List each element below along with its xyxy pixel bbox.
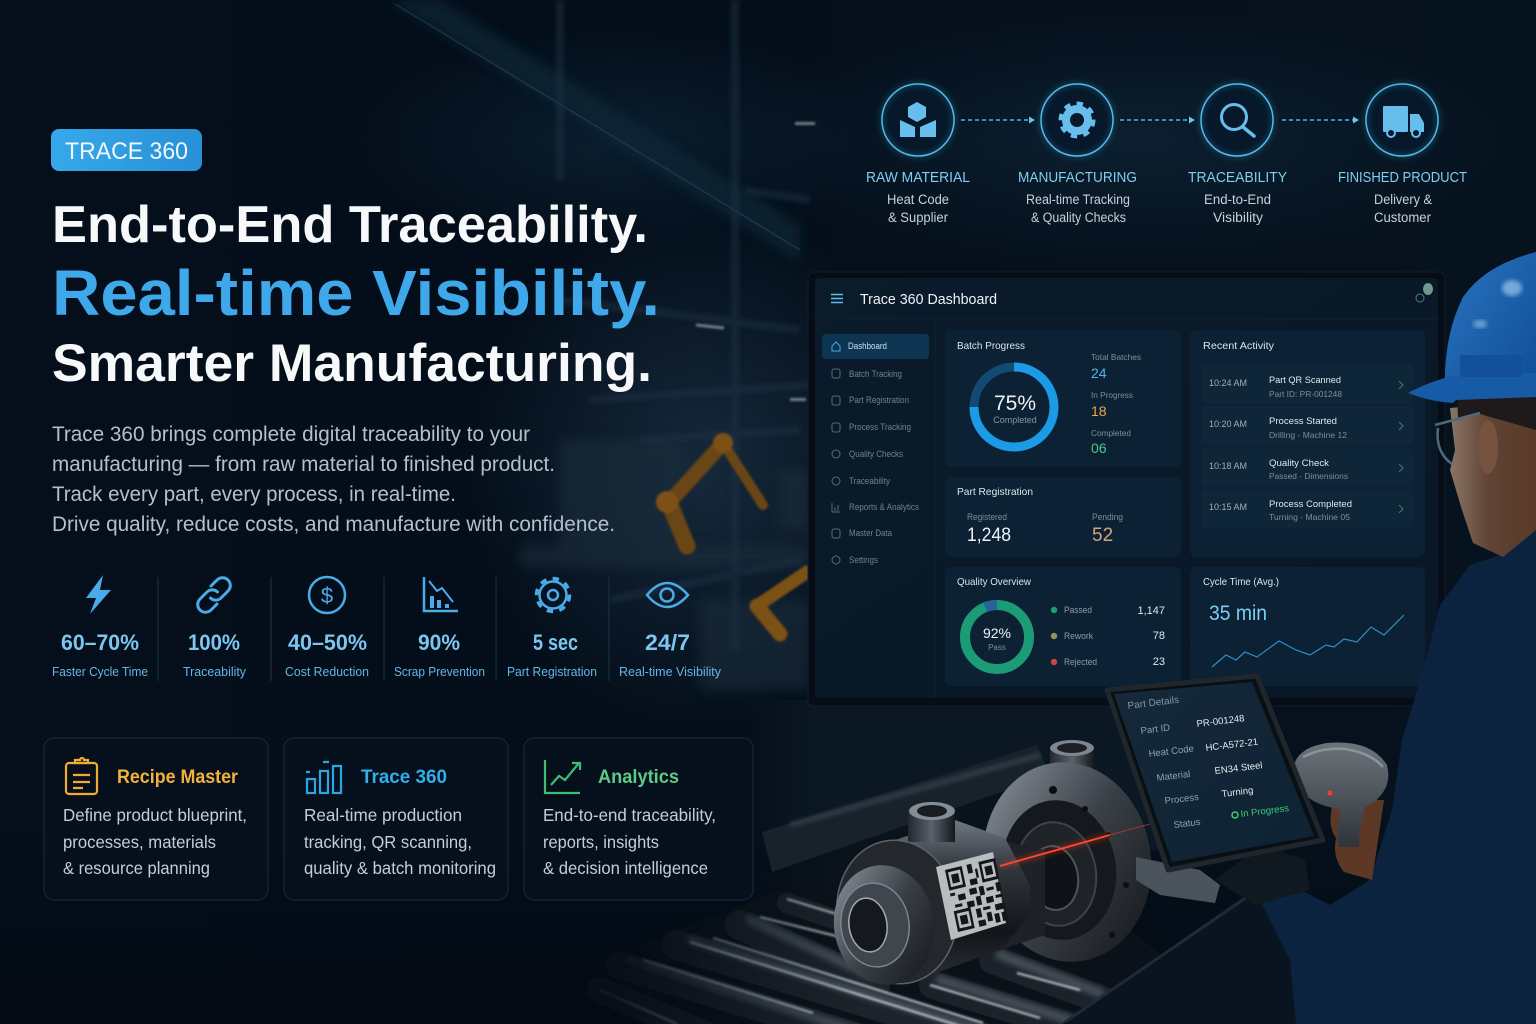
title — [52, 196, 660, 393]
step: finished product: Customer — [1374, 210, 1431, 225]
tablet: part details: HC-A572-21 — [1205, 737, 1259, 754]
dashboard monitor — [808, 272, 1445, 706]
step: raw material — [866, 84, 970, 225]
stat: part registration: Part Registration — [507, 665, 597, 679]
rear flange — [970, 740, 1220, 973]
panel: recent activity: Recent Activity — [1203, 340, 1275, 352]
stat: part registration — [507, 578, 597, 679]
rollers — [600, 899, 1110, 1024]
sidebar navigation — [822, 334, 929, 565]
card: recipe master: Define product blueprint, — [63, 805, 247, 825]
card: trace 360: quality & batch monitoring — [304, 858, 496, 878]
panel: batch progress: 24 — [1091, 365, 1107, 381]
stat: traceability: 100% — [188, 630, 240, 655]
stat: faster cycle time — [52, 575, 148, 679]
tablet: part details: Material — [1156, 769, 1191, 784]
worker — [1215, 252, 1536, 1024]
sidebar navigation: Dashboard — [848, 341, 887, 351]
tablet: part details: EN34 Steel — [1214, 760, 1263, 777]
dashboard header: Trace 360 Dashboard — [860, 292, 997, 308]
tablet: part details: In Progress — [1240, 803, 1290, 820]
panel: quality overview — [945, 567, 1181, 686]
stat: cost reduction: $ — [321, 583, 333, 608]
intro paragraph — [52, 423, 615, 536]
ear — [1478, 420, 1498, 474]
tablet: part details: Status — [1173, 817, 1201, 831]
panel: cycle time — [1190, 567, 1425, 686]
stats row — [52, 575, 722, 681]
panel: cycle time: Cycle Time (Avg.) — [1203, 576, 1279, 588]
title: End-to-End Traceability. — [52, 196, 648, 254]
sidebar navigation: Batch Tracking — [849, 369, 902, 379]
neck and face — [1450, 400, 1536, 557]
activity rows: Part QR Scanned — [1269, 375, 1341, 386]
panel: recent activity — [1190, 330, 1425, 557]
panel: quality overview: 23 — [1153, 656, 1165, 668]
stat: real-time visibility: 24/7 — [645, 630, 690, 655]
panel: quality overview: 78 — [1153, 630, 1165, 642]
step: manufacturing — [1018, 84, 1137, 225]
activity rows: 10:24 AM — [1209, 378, 1247, 389]
intro paragraph: Drive quality, reduce costs, and manufacture with confidence. — [52, 513, 615, 536]
conveyor and rollers — [600, 745, 1300, 1024]
activity rows: Turning - Machine 05 — [1269, 512, 1350, 522]
panel: quality overview: Pass — [988, 643, 1006, 652]
panel: quality overview: Rejected — [1064, 657, 1097, 667]
step: raw material: & Supplier — [888, 210, 948, 225]
card: recipe master: & resource planning — [63, 858, 210, 878]
badge: TRACE 360 — [65, 138, 188, 165]
intro paragraph: Trace 360 brings complete digital traceability to your — [52, 423, 530, 446]
activity rows: Quality Check — [1269, 458, 1329, 469]
machined part with QR code — [826, 740, 1220, 992]
step: raw material: Heat Code — [887, 192, 949, 207]
stat: traceability: Traceability — [183, 665, 247, 679]
stat: part registration: 5 sec — [533, 630, 578, 655]
panel: quality overview: Quality Overview — [957, 576, 1031, 588]
activity rows: Process Started — [1269, 416, 1337, 427]
QR label — [936, 852, 1008, 940]
card: trace 360: Real-time production — [304, 805, 462, 825]
panel: batch progress: Completed — [993, 415, 1037, 425]
card: analytics: reports, insights — [543, 832, 659, 852]
panel: part registration: Registered — [967, 512, 1007, 522]
activity rows: Passed - Dimensions — [1269, 471, 1348, 481]
rear conveyor bar — [745, 745, 1060, 970]
step: manufacturing: MANUFACTURING — [1018, 169, 1137, 186]
stat: cost reduction: 40–50% — [288, 630, 367, 655]
sidebar navigation: Traceability — [849, 476, 891, 486]
panel: part registration — [945, 477, 1181, 557]
gloved hand — [1215, 845, 1310, 905]
sparkline — [1212, 615, 1404, 667]
tablet: part details: PR-001248 — [1196, 713, 1245, 730]
panel: quality overview: 92% — [983, 625, 1011, 641]
stat: faster cycle time: 60–70% — [61, 630, 139, 655]
glasses — [1435, 413, 1480, 464]
stat: cost reduction: Cost Reduction — [285, 665, 369, 679]
stat: traceability — [183, 578, 247, 679]
card: analytics: Analytics — [598, 767, 679, 788]
card: analytics: End-to-end traceability, — [543, 805, 716, 825]
arrow: manufacturing to traceability — [1120, 116, 1195, 124]
step: traceability: End-to-End — [1204, 192, 1271, 207]
scanner hand — [1330, 800, 1384, 880]
step: finished product — [1338, 84, 1467, 225]
step: manufacturing: & Quality Checks — [1031, 210, 1126, 225]
card: trace 360: tracking, QR scanning, — [304, 832, 472, 852]
dashboard header — [831, 283, 1433, 308]
card: analytics: & decision intelligence — [543, 858, 708, 878]
panel: cycle time: 35 min — [1209, 602, 1267, 625]
badge — [51, 129, 202, 171]
arrow: traceability to finished product — [1282, 116, 1359, 124]
activity rows: 10:15 AM — [1209, 502, 1247, 513]
step: traceability: TRACEABILITY — [1188, 169, 1287, 186]
barcode scanner — [1293, 742, 1388, 847]
tablet: part details — [1107, 676, 1323, 870]
icon: clipboard — [66, 758, 97, 794]
step: traceability: Visibility — [1213, 210, 1263, 225]
sidebar navigation: Reports & Analytics — [849, 502, 920, 512]
title: Real-time Visibility. — [52, 257, 660, 329]
tablet: part details: Process — [1164, 792, 1200, 807]
step: raw material: RAW MATERIAL — [866, 169, 970, 186]
panel: part registration: Pending — [1092, 512, 1123, 522]
card: recipe master: Recipe Master — [117, 767, 239, 788]
tablet: part details: Turning — [1221, 785, 1254, 800]
panel: batch progress: Batch Progress — [957, 340, 1025, 352]
card: trace 360 — [284, 738, 508, 900]
icon: bars — [306, 762, 341, 793]
stat: scrap prevention: Scrap Prevention — [394, 665, 485, 679]
sidebar navigation: Quality Checks — [849, 449, 904, 459]
activity rows: Part ID: PR-001248 — [1269, 389, 1342, 399]
roller bed — [600, 890, 1250, 1024]
card: trace 360: Trace 360 — [361, 767, 447, 788]
stat: cost reduction — [285, 577, 369, 679]
sidebar navigation: Process Tracking — [849, 422, 911, 432]
panel: batch progress — [945, 330, 1181, 467]
panel: batch progress: 06 — [1091, 440, 1107, 456]
process flow — [866, 84, 1467, 225]
activity rows: 10:20 AM — [1209, 419, 1247, 430]
card: recipe master: processes, materials — [63, 832, 216, 852]
side frame — [1062, 888, 1300, 1024]
stat: real-time visibility: Real-time Visibility — [619, 665, 722, 679]
panel: batch progress: In Progress — [1091, 390, 1133, 400]
laser beam — [1000, 824, 1150, 866]
stat: scrap prevention: 90% — [418, 630, 460, 655]
panel: part registration: 52 — [1092, 525, 1113, 546]
panel: part registration: Part Registration — [957, 486, 1033, 498]
panel: batch progress: 75% — [994, 392, 1036, 415]
sidebar navigation: Settings — [849, 555, 879, 565]
stat: faster cycle time: Faster Cycle Time — [52, 665, 148, 679]
title: Smarter Manufacturing. — [52, 334, 652, 393]
icon: line chart — [545, 760, 580, 793]
activity rows: Process Completed — [1269, 499, 1352, 510]
panel: batch progress: Completed — [1091, 428, 1131, 438]
donut 92% — [965, 605, 1029, 669]
activity rows: 10:18 AM — [1209, 461, 1247, 472]
panel: part registration: 1,248 — [967, 525, 1011, 546]
activity rows: Drilling - Machine 12 — [1269, 430, 1347, 440]
activity rows — [1201, 365, 1413, 528]
intro paragraph: Track every part, every process, in real-time. — [52, 483, 456, 506]
sidebar navigation: Part Registration — [849, 395, 909, 405]
tablet: part details: Part Details — [1127, 695, 1180, 712]
panel: batch progress: Total Batches — [1091, 352, 1141, 362]
step: finished product: FINISHED PRODUCT — [1338, 169, 1467, 186]
card: recipe master — [44, 738, 268, 900]
robot arms in the background — [656, 433, 807, 634]
step: finished product: Delivery & — [1374, 192, 1432, 207]
tablet: part details: Heat Code — [1148, 744, 1194, 760]
step: manufacturing: Real-time Tracking — [1026, 192, 1130, 207]
jacket — [1215, 530, 1536, 1024]
stat: real-time visibility — [619, 583, 722, 679]
panel: quality overview: 1,147 — [1137, 605, 1165, 617]
panel: quality overview: Rework — [1064, 631, 1093, 641]
card: analytics — [524, 738, 753, 900]
intro paragraph: manufacturing — from raw material to finished product. — [52, 453, 555, 476]
arrow: raw material to manufacturing — [961, 116, 1035, 124]
panel: quality overview: Passed — [1064, 605, 1092, 615]
hair — [1457, 387, 1536, 430]
progress ring 75% — [974, 367, 1054, 447]
tablet: part details: Part ID — [1140, 722, 1171, 737]
panel: batch progress: 18 — [1091, 403, 1107, 419]
front body — [826, 802, 1045, 992]
hard hat — [1408, 252, 1536, 403]
step: traceability — [1188, 84, 1287, 225]
stat: scrap prevention — [394, 577, 485, 679]
sidebar navigation: Master Data — [849, 528, 892, 538]
